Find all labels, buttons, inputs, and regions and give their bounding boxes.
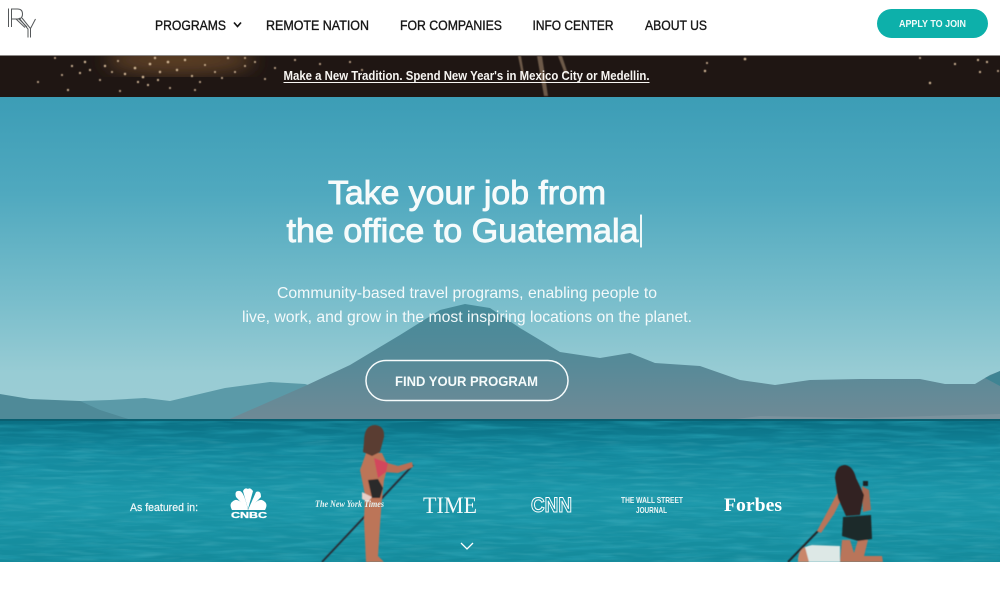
hero heading: the office to Guatemala [286,212,639,249]
mountains [0,304,1000,421]
logo: CNBC: CNBC [231,510,267,520]
firework streaks [518,56,568,96]
navigation: about us: ABOUT US [645,18,707,33]
hero description: Community-based travel programs, enabling people to [277,285,657,302]
as featured in label: As featured in: [130,502,198,514]
banner link text: Make a New Tradition. Spend New Year's in Mexico City or Medellin. [284,69,650,83]
firework sparks [37,57,999,92]
hero description [242,285,692,326]
navigation: for companies: FOR COMPANIES [400,18,502,33]
logo: The Wall Street Journal: THE WALL STREET [621,495,684,505]
find your program button: FIND YOUR PROGRAM [395,373,538,389]
logo: CNN: CNN [531,494,572,517]
hero heading [286,174,642,249]
header bar [0,0,1000,55]
icon: scroll down chevron [461,543,473,549]
typing cursor [640,215,642,247]
find your program button [366,360,568,400]
sky [0,97,1000,422]
apply to join button [877,9,988,38]
logo: TIME: TIME [423,493,477,518]
navigation: info center: INFO CENTER [532,18,614,33]
logo: RY monogram [8,8,36,38]
hero photo [0,97,1000,562]
lake water [0,420,1000,562]
logo: Forbes: Forbes [724,495,782,516]
navigation: remote nation: REMOTE NATION [266,18,369,33]
logo: The New York Times: The New York Times [315,500,384,510]
navigation: programs: PROGRAMS [155,18,226,33]
announcement banner [0,56,1000,97]
right paddleboarder [788,465,883,562]
logo: The Wall Street Journal: JOURNAL [636,505,667,515]
left paddleboarder [322,425,413,562]
logo: CNBC [231,488,267,520]
hero description: live, work, and grow in the most inspiring locations on the planet. [242,309,692,326]
hero heading: Take your job from [328,174,606,211]
logo: The Wall Street Journal [621,495,684,515]
apply to join button: APPLY TO JOIN [899,19,966,30]
